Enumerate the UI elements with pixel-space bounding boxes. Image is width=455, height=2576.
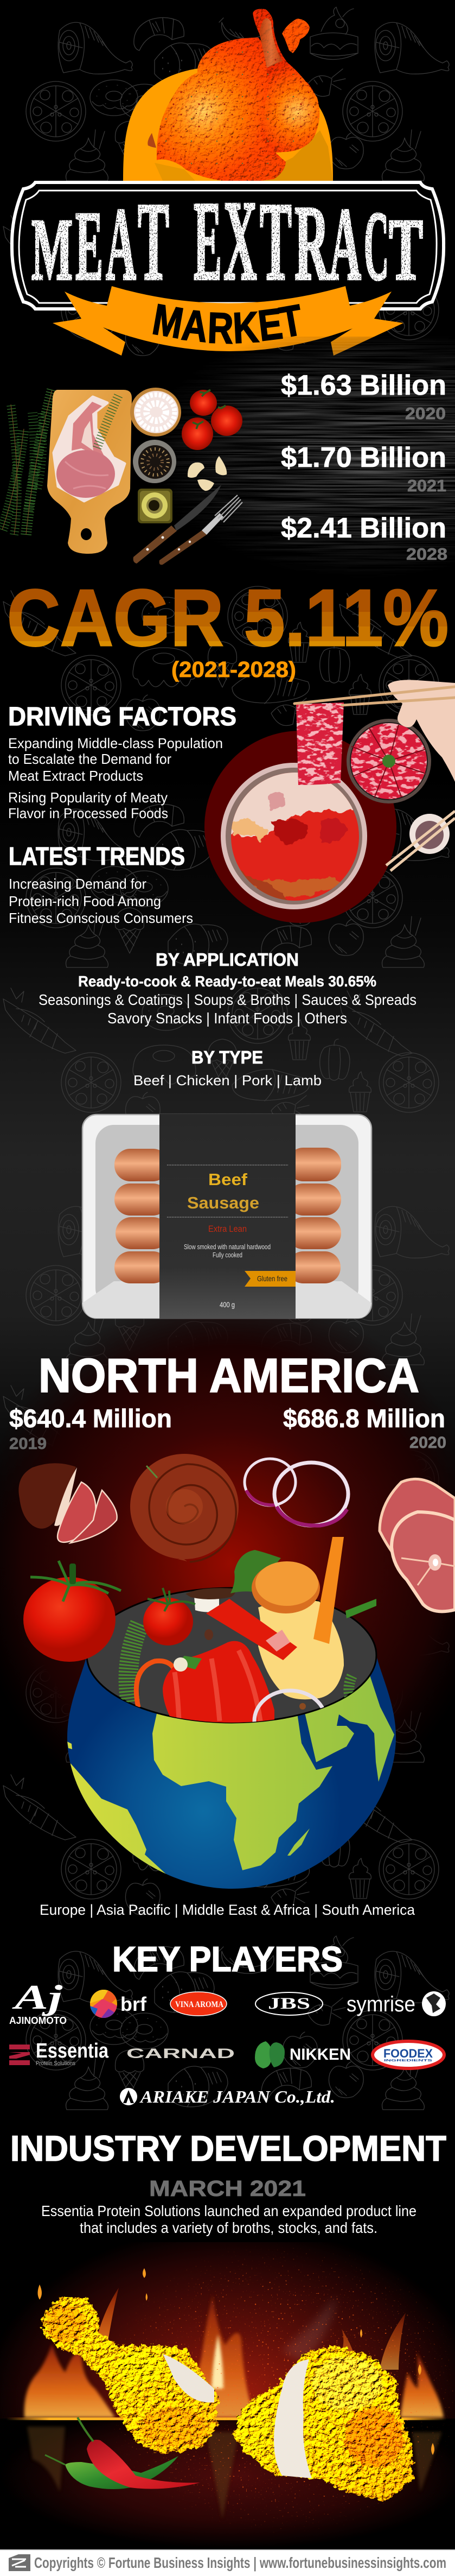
garlic cloves xyxy=(188,456,227,491)
title frame xyxy=(12,177,444,309)
title text: X xyxy=(223,177,257,304)
driving factors: to Escalate the Demand for xyxy=(8,751,171,767)
hot pot illustration xyxy=(204,680,455,923)
north america 2020 value xyxy=(283,1404,446,1452)
by type: Beef | Chicken | Pork | Lamb xyxy=(133,1072,322,1088)
red glow behind globe xyxy=(0,1292,455,1840)
logo: Ariake Japan: ARIAKE JAPAN Co.,Ltd. xyxy=(139,2087,335,2106)
background doodles xyxy=(3,7,449,2110)
north america 2019 value: 2019 xyxy=(9,1435,47,1453)
sausage tray: Sausage xyxy=(187,1193,259,1212)
logo: Ajinomoto xyxy=(9,1978,67,2026)
development description: Essentia Protein Solutions launched an expanded product line xyxy=(41,2202,416,2219)
floating embers xyxy=(38,2268,434,2455)
sauce dish with chopsticks xyxy=(386,811,455,871)
logo: Foodex: INGREDIENTS xyxy=(384,2059,433,2062)
development description: that includes a variety of broths, stocks, and fats. xyxy=(80,2219,377,2236)
development description xyxy=(41,2202,416,2236)
sausage tray xyxy=(82,1114,371,1319)
latest trends: Protein-rich Food Among xyxy=(9,893,161,909)
horizon light xyxy=(6,2417,447,2420)
knife xyxy=(133,485,221,564)
logo: Nikken: NIKKEN xyxy=(290,2046,351,2064)
key players heading: KEY PLAYERS xyxy=(112,1939,343,1979)
logo: Vina Aroma: VINA AROMA xyxy=(175,2000,223,2009)
logo: Nikken xyxy=(255,2041,351,2068)
CAGR period: (2021-2028) xyxy=(171,657,296,682)
flame core xyxy=(212,2334,223,2389)
green chili xyxy=(45,2455,178,2489)
label text: Beef xyxy=(208,1170,248,1189)
ribbon text: E xyxy=(255,299,285,350)
heading: LATEST TRENDS xyxy=(9,842,185,870)
floor reflections xyxy=(27,2427,442,2519)
globe body xyxy=(67,1655,396,1889)
sausage tray: 400 g xyxy=(220,1300,235,1309)
smoke xyxy=(282,2296,336,2362)
pepper strip xyxy=(136,1661,177,1707)
hanging meat slice xyxy=(296,702,344,785)
title text: A xyxy=(329,186,361,302)
ingredients flat-lay xyxy=(2,388,242,565)
by type xyxy=(133,1047,322,1088)
pepper bowl xyxy=(133,440,176,483)
driving factors: Flavor in Processed Foods xyxy=(8,805,168,821)
north america 2019 value xyxy=(9,1404,172,1453)
logo: brf: brf xyxy=(120,1993,147,2015)
logo: JBS: JBS xyxy=(268,1995,310,2012)
mushroom xyxy=(194,1596,219,1612)
small meat plate xyxy=(347,719,431,803)
logo: Ajinomoto: Aj xyxy=(11,1978,62,2016)
date: MARCH 2021 xyxy=(149,2176,306,2201)
hot pot bowl xyxy=(217,760,374,909)
title text: T xyxy=(389,201,423,299)
small tomato xyxy=(143,1598,193,1645)
heading: DRIVING FACTORS xyxy=(8,702,236,731)
sausage coil xyxy=(130,1454,239,1562)
ribbon text: M xyxy=(149,295,187,348)
drumstick white meat xyxy=(163,2354,214,2402)
roast chicken xyxy=(146,9,325,181)
orange ribbon xyxy=(53,286,403,356)
sausage tray: Extra Lean xyxy=(208,1224,247,1234)
continents xyxy=(67,1672,394,1884)
red chili xyxy=(78,2417,200,2489)
thigh white meat xyxy=(274,2359,312,2478)
latest trends xyxy=(9,842,193,926)
title text: E xyxy=(194,179,222,304)
wood texture panel xyxy=(166,337,455,570)
pot opening xyxy=(87,1588,376,1723)
market size values: $2.41 Billion xyxy=(281,512,446,544)
sausage tray: Slow smoked with natural hardwood xyxy=(184,1243,271,1251)
north america 2020 value: $686.8 Million xyxy=(283,1404,445,1433)
market size values: 2028 xyxy=(406,545,447,564)
food inside the pot xyxy=(118,1587,357,1723)
title text: E xyxy=(75,192,103,301)
green pepper ring xyxy=(345,1599,376,1618)
ribbon text: R xyxy=(207,303,234,353)
ribbon text: T xyxy=(276,295,306,347)
sausages xyxy=(114,1148,341,1283)
herb xyxy=(129,1623,140,1702)
other regions: Europe | Asia Pacific | Middle East & Africa | South America xyxy=(40,1902,415,1918)
logo: Essentia: Protein Solutions xyxy=(36,2060,75,2067)
tomatoes xyxy=(182,390,242,450)
footer logo xyxy=(9,2554,30,2571)
logo: brf xyxy=(90,1990,147,2019)
heading: BY TYPE xyxy=(191,1047,263,1067)
title text: T xyxy=(138,179,169,303)
label band xyxy=(159,1114,296,1319)
title text: C xyxy=(364,192,389,301)
ribbon text: K xyxy=(232,302,260,352)
flames xyxy=(24,2288,444,2417)
sausage tray: Fully cooked xyxy=(213,1251,242,1259)
salt bowl xyxy=(130,388,181,436)
onion ring xyxy=(254,1691,326,1751)
logo: Foodex: FOODEX xyxy=(383,2047,433,2060)
title text: M xyxy=(31,201,73,299)
hand xyxy=(388,680,455,782)
big tomato xyxy=(23,1561,121,1662)
heading: BY APPLICATION xyxy=(156,950,299,970)
logo: Carnad: CARNAD xyxy=(126,2046,235,2061)
logo: Foodex xyxy=(373,2041,444,2068)
value 2020: $1.63 Billion xyxy=(281,370,446,401)
title text: R xyxy=(294,183,330,302)
north america heading: NORTH AMERICA xyxy=(39,1349,419,1402)
fire illustration xyxy=(0,2242,455,2549)
potato xyxy=(258,1600,344,1699)
red strip xyxy=(206,1599,297,1660)
logo: Ajinomoto: AJINOMOTO xyxy=(9,2015,67,2026)
orange arch xyxy=(123,66,333,181)
logo: Essentia: Essentia xyxy=(36,2040,109,2062)
market size values: 2021 xyxy=(407,476,446,495)
by application: Ready-to-cook & Ready-to-eat Meals 30.65% xyxy=(78,973,376,990)
market size values: $1.70 Billion xyxy=(281,442,446,473)
latest trends: Increasing Demand for xyxy=(9,876,146,892)
title text: T xyxy=(260,179,292,303)
driving factors: Meat Extract Products xyxy=(8,768,143,784)
big red pepper xyxy=(163,1641,274,1724)
fork xyxy=(159,495,242,565)
driving factors xyxy=(8,702,236,821)
ham steaks xyxy=(380,1479,455,1611)
logo: Essentia xyxy=(9,2040,109,2067)
carrot stick xyxy=(313,1537,344,1644)
market size values xyxy=(281,370,447,564)
north america 2020 value: 2020 xyxy=(409,1434,446,1452)
north america 2019 value: $640.4 Million xyxy=(9,1404,172,1433)
title text: A xyxy=(106,186,136,302)
fried drumstick xyxy=(42,2297,217,2455)
by application: Savory Snacks | Infant Foods | Others xyxy=(107,1010,347,1027)
carrot slice xyxy=(252,1561,320,1613)
peppercorns xyxy=(204,1629,213,1640)
footer xyxy=(0,2549,455,2576)
by application xyxy=(39,950,416,1027)
logo: Vina Aroma xyxy=(170,1992,227,2016)
ribbon text: A xyxy=(180,300,210,351)
pork chop xyxy=(54,397,125,501)
globe pot xyxy=(23,1537,396,1889)
ribbon text xyxy=(149,295,306,353)
hero chicken on orange arch xyxy=(123,9,333,181)
oil glass xyxy=(138,489,172,523)
logo: JBS xyxy=(255,1992,323,2015)
ham with slices xyxy=(18,1463,117,1543)
driving factors: Rising Popularity of Meaty xyxy=(8,789,168,806)
cutting board xyxy=(47,390,132,554)
driving factors: Expanding Middle-class Population xyxy=(8,735,223,751)
rosemary xyxy=(2,390,52,535)
parsley xyxy=(230,1550,281,1593)
chopsticks xyxy=(294,687,455,705)
market size values: 2020 xyxy=(405,404,446,423)
sparks xyxy=(0,2242,455,2549)
latest trends: Fitness Conscious Consumers xyxy=(9,910,193,926)
dark red disc xyxy=(204,731,396,923)
onion rings xyxy=(245,1459,348,1526)
fried thigh xyxy=(232,2345,412,2502)
by application: Seasonings & Coatings | Soups & Broths | Sauces & Spreads xyxy=(39,991,416,1008)
logo: Symrise: symrise xyxy=(347,1992,415,2016)
sausage tray: Gluten free xyxy=(257,1274,287,1283)
